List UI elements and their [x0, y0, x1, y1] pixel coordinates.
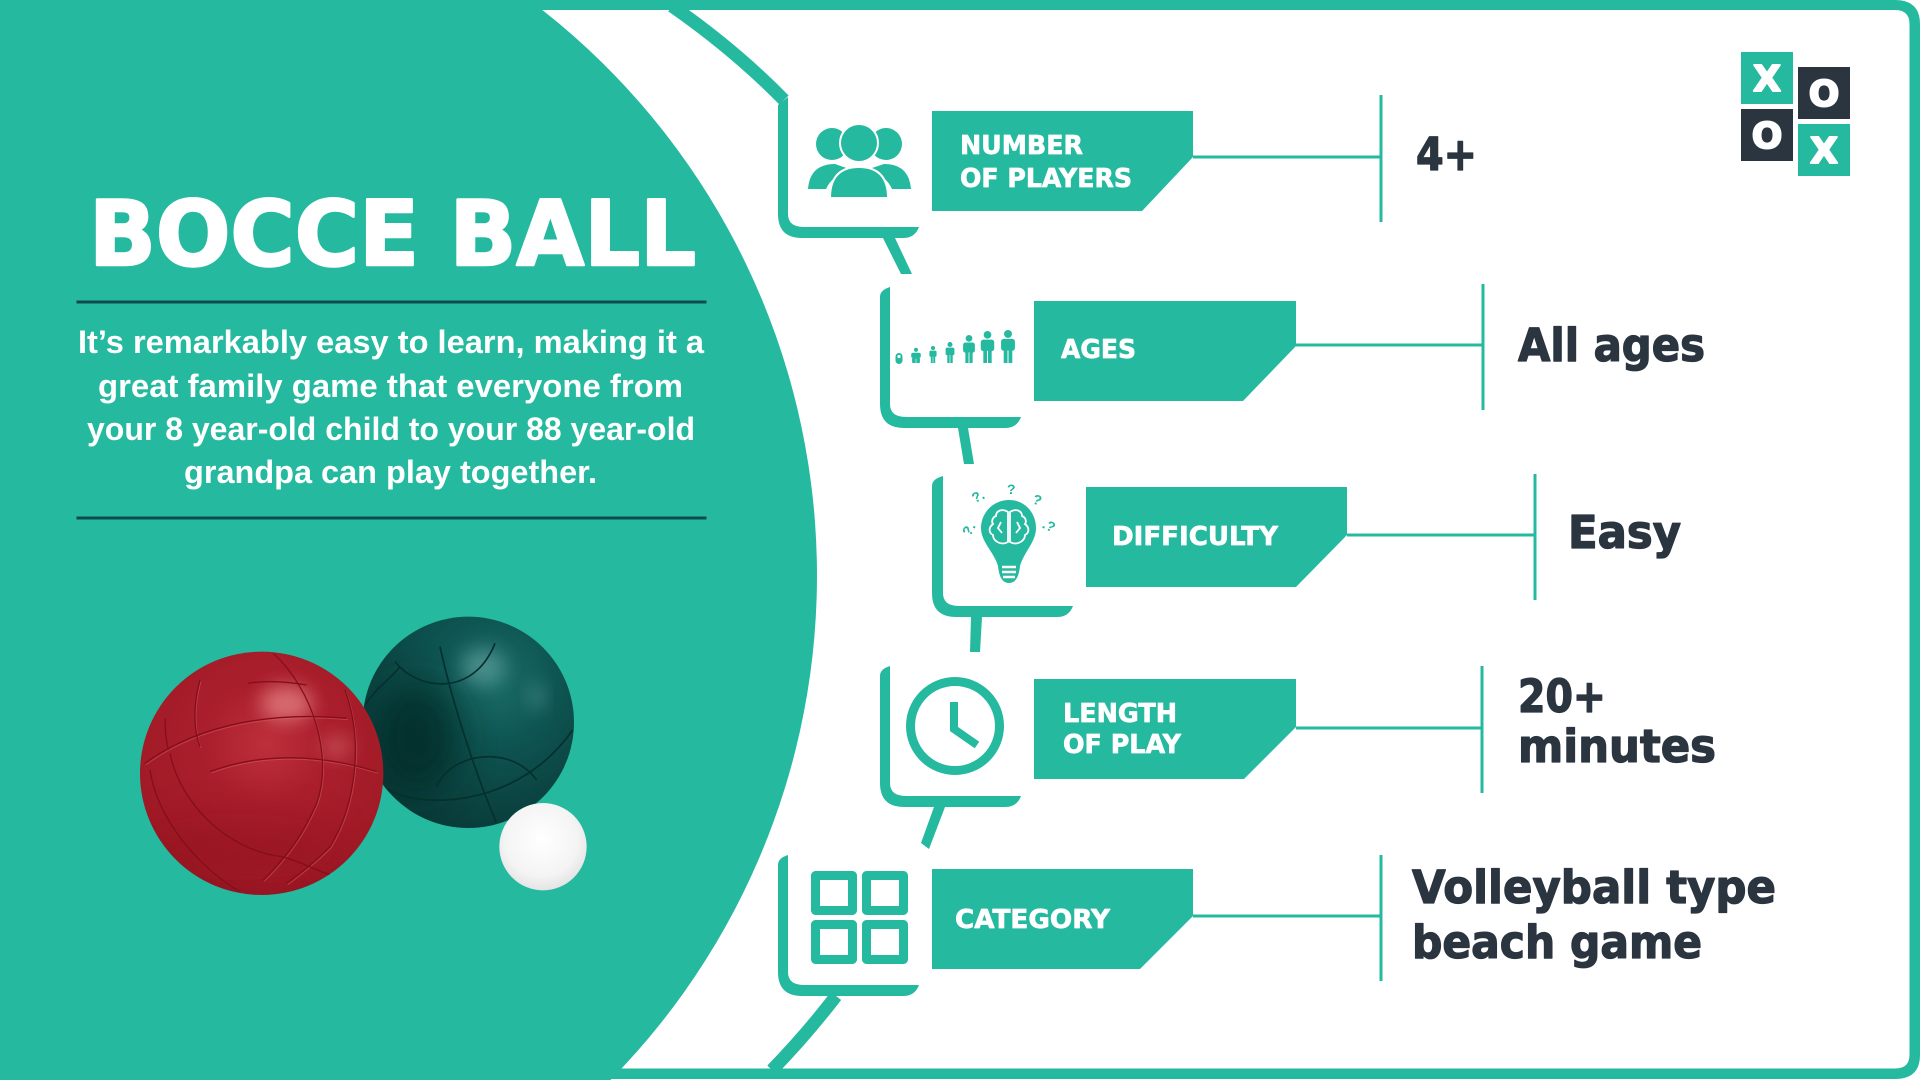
row: difficulty: [932, 474, 1681, 617]
icon: clock: [910, 682, 1000, 770]
row: number of players: [778, 95, 1477, 238]
banner: ages: AGES: [1061, 335, 1136, 365]
logo: tic tac toe: O: [1752, 116, 1782, 157]
connector 1 to 2: [883, 238, 912, 274]
banner: number of players: OF PLAYERS: [960, 164, 1132, 194]
row: length of play: [880, 666, 1716, 807]
description text: It’s remarkably easy to learn, making it a: [78, 324, 704, 360]
description text: grandpa can play together.: [184, 454, 597, 490]
value: easy: Easy: [1568, 506, 1681, 559]
banner: category: CATEGORY: [955, 905, 1111, 935]
leader line and tick: [1347, 474, 1535, 600]
banner: length of play: OF PLAY: [1063, 730, 1182, 760]
value: 20+ minutes: 20+: [1518, 670, 1606, 723]
icon: lightbulb with brain: ?: [1007, 481, 1016, 497]
connector 4 to 5: [921, 807, 945, 849]
white pallino ball: [499, 803, 587, 890]
banner: difficulty: DIFFICULTY: [1112, 522, 1279, 552]
red ball: [140, 652, 383, 895]
value: volleyball type beach game: beach game: [1412, 916, 1702, 969]
title: BOCCE BALL: [89, 182, 696, 287]
left teal circle panel: [0, 0, 817, 1080]
icon: lightbulb with brain: ?: [1031, 491, 1044, 509]
leader line and tick: [1193, 855, 1381, 981]
arc connector top: [672, 6, 784, 100]
icon: lightbulb with brain: [959, 481, 1058, 583]
leader line and tick: [1296, 284, 1483, 410]
logo: tic tac toe: X: [1810, 131, 1838, 172]
icon: lightbulb with brain: ?.: [959, 520, 979, 538]
row: ages: [880, 284, 1705, 428]
logo: tic tac toe: [1741, 52, 1850, 176]
green ball: [363, 617, 574, 828]
bracket frame 2: [880, 287, 1021, 428]
banner: category: [932, 869, 1193, 969]
banner: length of play: [1034, 679, 1296, 779]
leader line and tick: [1193, 95, 1381, 222]
icon: lightbulb with brain: ?.: [969, 486, 987, 506]
bracket frame 4: [880, 666, 1021, 807]
description text: [78, 324, 704, 490]
connector 3 to 4: [970, 617, 982, 652]
value: 20+ minutes: [1518, 670, 1716, 773]
banner: number of players: [932, 111, 1193, 211]
value: 20+ minutes: minutes: [1518, 720, 1716, 773]
banner: difficulty: [1086, 487, 1347, 587]
arc connector bottom: [772, 996, 836, 1070]
row: category: [778, 855, 1776, 996]
icon: lightbulb with brain: .?: [1040, 516, 1058, 535]
divider top: [76, 300, 706, 304]
value: 4+: 4+: [1416, 128, 1477, 181]
bracket frame 5: [778, 855, 919, 996]
connector 2 to 3: [958, 428, 974, 464]
banner: length of play: LENGTH: [1063, 699, 1177, 729]
description text: great family game that everyone from: [98, 368, 683, 404]
divider bottom: [76, 516, 706, 520]
icon: category grid: [816, 876, 904, 960]
logo: tic tac toe: X: [1753, 59, 1781, 100]
banner: ages: [1034, 301, 1296, 401]
value: volleyball type beach game: [1412, 861, 1776, 969]
value: all ages: All ages: [1518, 319, 1705, 372]
value: volleyball type beach game: Volleyball type: [1412, 861, 1776, 914]
icon: ages figures: [896, 330, 1015, 364]
bracket frame 1: [778, 97, 919, 238]
description text: your 8 year-old child to your 88 year-old: [87, 411, 695, 447]
bracket frame 3: [932, 476, 1073, 617]
leader line and tick: [1296, 666, 1482, 793]
banner: number of players: NUMBER: [960, 131, 1083, 161]
bocce balls photo illustration: [140, 617, 587, 895]
icon: group of people: [808, 124, 911, 198]
logo: tic tac toe: O: [1809, 74, 1839, 115]
